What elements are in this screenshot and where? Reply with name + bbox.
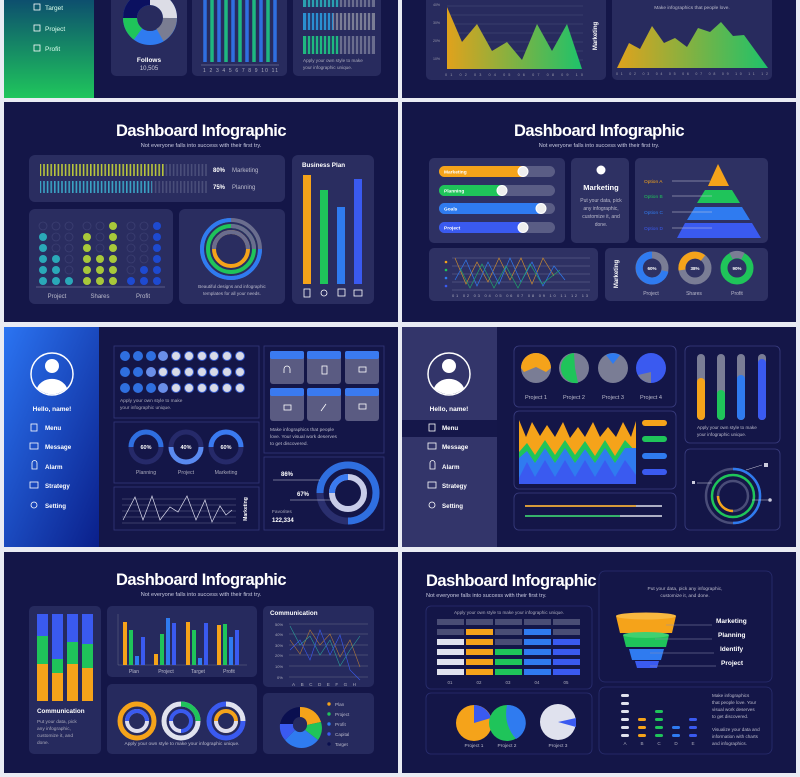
panel: donut legend: Profit — [335, 722, 346, 727]
panel: color table: 04 — [535, 680, 540, 685]
panel: stacked bars: any infographic, — [37, 726, 71, 732]
panel: dot columns: Profit — [136, 294, 150, 300]
sidebar: blue profile menu: Message — [45, 444, 72, 451]
panel: line chart: ABCDEFGH — [292, 682, 356, 687]
panel: donuts: Marketing — [614, 259, 620, 288]
panel: sliders — [429, 158, 565, 243]
panel: area chart 1: 01 02 03 04 05 06 07 08 09 10 — [445, 73, 583, 77]
panel: donut legend: Target — [335, 742, 348, 747]
panel: capsule bars: and infographics. — [712, 741, 747, 746]
panel: funnel — [599, 571, 772, 682]
sidebar: profile menu: Hello, name! — [430, 406, 468, 413]
panel: dot matrix: Apply your own style to make — [120, 398, 183, 404]
panel: marketing text: any infographic, — [583, 206, 619, 212]
title — [514, 122, 684, 149]
panel: line chart: 50% — [275, 622, 283, 627]
panel: capsule bars: to get discovered. — [712, 714, 748, 719]
panel: three rings: Marketing — [215, 470, 238, 476]
panel: funnel: customize it, and done. — [660, 593, 710, 599]
panel: area chart 1: 10% — [433, 57, 440, 61]
panel: bar rows — [293, 0, 381, 76]
panel: pies — [514, 346, 676, 407]
title: Dashboard Infographic — [116, 122, 286, 140]
panel: color table: 02 — [477, 680, 482, 685]
panel: stacked bars: Communication — [37, 708, 85, 715]
panel: concentric rings: templates for all your needs. — [203, 291, 261, 296]
panel: icon tiles: Make infographics that people — [270, 427, 334, 433]
panel: pies — [426, 693, 592, 754]
panel: line chart — [114, 487, 259, 530]
panel: icon tiles: to get discovered. — [270, 441, 308, 447]
panel: marketing text: Marketing — [583, 183, 619, 192]
panel: donuts: 90% — [732, 266, 742, 271]
slide 8 — [402, 552, 796, 773]
panel: donuts: Project — [643, 291, 659, 297]
panel: donut legend — [263, 693, 374, 754]
panel: big donut: 122,334 — [272, 518, 294, 524]
panel: pyramid: Option A — [644, 179, 663, 185]
sidebar: profile menu: Setting — [442, 503, 463, 510]
panel: line chart: 01 02 03 04 05 06 07 08 09 10 11 12 13 — [452, 293, 589, 298]
slide 6 — [402, 327, 796, 547]
title: Not everyone falls into success with their first try. — [141, 143, 262, 149]
panel: big donut: 67% — [297, 492, 310, 498]
panel: donuts — [605, 248, 768, 301]
slide 2 — [402, 0, 796, 98]
panel: three rings — [114, 422, 259, 483]
panel: capsule bars: information with charts — [712, 734, 759, 739]
panel: progress ticks — [29, 155, 285, 202]
sidebar: blue profile menu — [4, 327, 99, 547]
title: Not everyone falls into success with their first try. — [539, 143, 660, 149]
panel: capsule bars: E — [691, 741, 695, 746]
panel: color table: 01 — [448, 680, 453, 685]
title: Dashboard Infographic — [426, 572, 596, 590]
panel: sliders: Marketing — [444, 170, 467, 176]
panel: color table: 05 — [564, 680, 569, 685]
sidebar: profile menu: Strategy — [442, 483, 467, 490]
panel: line chart: 0% — [277, 675, 283, 680]
panel: capsule bars: D — [674, 741, 678, 746]
panel: dot matrix — [114, 346, 259, 418]
panel: funnel: Put your data, pick any infographic, — [648, 586, 722, 592]
panel: pies: Project 3 — [602, 395, 624, 401]
panel: pies: Project 3 — [549, 743, 568, 749]
sidebar: green: Target — [45, 5, 63, 12]
panel: dot columns: Project — [48, 294, 67, 300]
panel: pyramid: Option D — [644, 226, 663, 232]
panel: sliders: Project — [444, 226, 461, 232]
panel: capsule bars: Make infographics — [712, 693, 750, 698]
panel: donuts: 60% — [647, 266, 657, 271]
panel: stacked bars — [29, 606, 101, 754]
panel: pies: Project 4 — [640, 395, 662, 401]
panel: marketing text: done. — [595, 222, 607, 228]
panel: line chart: 30% — [275, 643, 283, 648]
panel: capsule bars — [599, 687, 772, 754]
panel: grouped bars: Profit — [223, 669, 235, 675]
panel: follows pie — [111, 0, 187, 76]
panel: progress ticks: 80% — [213, 168, 226, 174]
sidebar: profile menu: Alarm — [442, 464, 460, 471]
sidebar: blue profile menu: Hello, name! — [33, 406, 71, 413]
panel: area chart 1: Marketing — [593, 21, 599, 50]
panel: grouped bars: Plan — [129, 669, 139, 675]
title: Not everyone falls into success with their first try. — [141, 592, 262, 598]
title — [426, 572, 596, 599]
panel: color table — [426, 606, 592, 689]
sidebar: profile menu — [402, 327, 497, 547]
panel: capsule bars: visual work deserves — [712, 707, 755, 712]
panel: area chart 1: 20% — [433, 39, 440, 43]
panel: donuts: 38% — [690, 266, 700, 271]
panel: vertical bars — [192, 0, 287, 76]
panel: three rings: 40% — [180, 445, 192, 451]
panel: marketing text: customize it, and — [582, 214, 620, 220]
sidebar: blue profile menu: Strategy — [45, 483, 70, 490]
panel: concentric rings — [179, 209, 285, 304]
sidebar: blue profile menu: Menu — [45, 425, 61, 432]
title: Dashboard Infographic — [514, 122, 684, 140]
panel: funnel: Project — [721, 660, 744, 667]
panel: donuts: Shares — [686, 291, 702, 297]
title — [116, 571, 286, 598]
panel: stacked bars: Put your data, pick — [37, 719, 77, 725]
sidebar: profile menu: Message — [442, 444, 469, 451]
panel: business plan: Business Plan — [302, 162, 345, 169]
panel: capsule bars: B — [640, 741, 644, 746]
panel: stacked area — [514, 411, 676, 489]
panel: line chart: Marketing — [243, 497, 249, 521]
panel: vertical bars: 1 2 3 4 5 6 7 8 9 10 11 — [203, 68, 278, 74]
panel: donuts: Profit — [731, 291, 743, 297]
panel: stacked bars: customize it, and — [37, 733, 73, 739]
sidebar: green: Profit — [45, 46, 60, 53]
panel: donut legend: Plan — [335, 702, 345, 707]
panel: three rings: 60% — [220, 445, 232, 451]
panel: follows pie: 10,505 — [140, 66, 159, 72]
panel: progress ticks: Planning — [232, 185, 255, 191]
panel: pies: Project 2 — [563, 395, 585, 401]
panel: marketing text — [571, 158, 629, 243]
panel: pyramid: Option C — [644, 210, 663, 216]
panel: bar rows: Apply your own style to make — [303, 58, 363, 63]
panel: progress ticks: Marketing — [232, 168, 258, 174]
panel: sliders: Planning — [444, 188, 464, 194]
panel: area chart 1: 30% — [433, 21, 440, 25]
panel: follows pie: Follows — [137, 57, 161, 64]
title — [116, 122, 286, 149]
panel: color table: Apply your own style to make your infographic unique. — [454, 610, 564, 615]
panel: grouped bars — [107, 606, 257, 677]
panel: business plan — [292, 155, 374, 304]
slide 3 — [4, 102, 398, 322]
panel: marketing text: Put your data, pick — [580, 198, 622, 204]
panel: area chart 1: 40% — [433, 3, 440, 7]
panel: area chart 2 — [612, 0, 772, 80]
panel: rings: Apply your own style to make your infographic unique. — [125, 741, 239, 747]
panel: funnel: Identify — [720, 646, 743, 653]
panel: pies: Project 1 — [465, 743, 484, 749]
panel: dot columns: Shares — [90, 294, 110, 300]
panel: line chart — [263, 606, 374, 687]
panel: capsule bars: Visualize your data and — [712, 727, 760, 732]
panel: donut legend: Capital — [335, 732, 349, 737]
slide 5 — [4, 327, 398, 547]
sidebar: profile menu: Menu — [442, 425, 458, 432]
sidebar: blue profile menu: Setting — [45, 503, 66, 510]
panel: grouped bars: Project — [158, 669, 174, 675]
panel: icon tiles — [264, 346, 384, 453]
sidebar: green — [4, 0, 94, 98]
panel: color table: 03 — [506, 680, 511, 685]
panel: vertical bars: your infographic unique. — [697, 432, 746, 437]
panel: icon tiles: love. Your visual work deserves — [270, 434, 338, 440]
slide 1 — [4, 0, 398, 98]
panel: line chart — [429, 248, 598, 301]
slide 4 — [402, 102, 796, 322]
panel: pies: Project 1 — [525, 395, 547, 401]
panel: area chart 2: Make infographics that people love. — [654, 5, 730, 11]
panel: dot columns — [29, 209, 173, 304]
panel: line chart: 10% — [275, 664, 283, 669]
panel: area chart 1 — [426, 0, 606, 80]
panel: capsule bars: A — [623, 741, 627, 746]
panel: rings — [107, 684, 257, 754]
panel: stacked bars: done. — [37, 740, 49, 746]
panel: sliders: Goals — [444, 206, 458, 212]
panel: big donut: 86% — [281, 472, 294, 478]
panel: pyramid: Option B — [644, 194, 663, 200]
panel: line chart: 40% — [275, 632, 283, 637]
title: Dashboard Infographic — [116, 571, 286, 589]
panel: funnel: Planning — [718, 632, 745, 639]
sidebar: green: Project — [45, 26, 65, 33]
panel: big donut — [264, 457, 384, 530]
panel: concentric rings: Beautiful designs and infographic — [198, 284, 267, 289]
panel: three rings: Planning — [136, 470, 156, 476]
panel: line chart: Communication — [270, 610, 318, 617]
panel: three rings: Project — [178, 470, 195, 476]
panel: area chart 2: 01 02 03 04 05 06 07 08 09 10 11 12 — [616, 72, 768, 76]
panel: grouped bars: Target — [191, 669, 206, 675]
panel: vertical bars: Apply your own style to make — [697, 425, 757, 430]
panel: three rings: 60% — [140, 445, 152, 451]
panel: bar rows: your infographic unique. — [303, 65, 352, 70]
title: Not everyone falls into success with their first try. — [426, 593, 547, 599]
panel: rings — [685, 449, 780, 530]
panel: vertical bars — [685, 346, 780, 443]
panel: pies: Project 2 — [498, 743, 517, 749]
panel: capsule bars: that people love. Your — [712, 700, 757, 705]
sidebar: blue profile menu: Alarm — [45, 464, 63, 471]
panel: sliders — [514, 493, 676, 530]
panel: progress ticks: 75% — [213, 185, 226, 191]
panel: funnel: Marketing — [716, 618, 747, 625]
panel: capsule bars: C — [657, 741, 661, 746]
panel: pyramid — [635, 158, 768, 243]
panel: donut legend: Project — [335, 712, 350, 717]
slide 7 — [4, 552, 398, 773]
panel: line chart: 20% — [275, 653, 283, 658]
panel: dot matrix: your infographic unique. — [120, 405, 171, 411]
panel: big donut: Favorites — [272, 509, 292, 515]
